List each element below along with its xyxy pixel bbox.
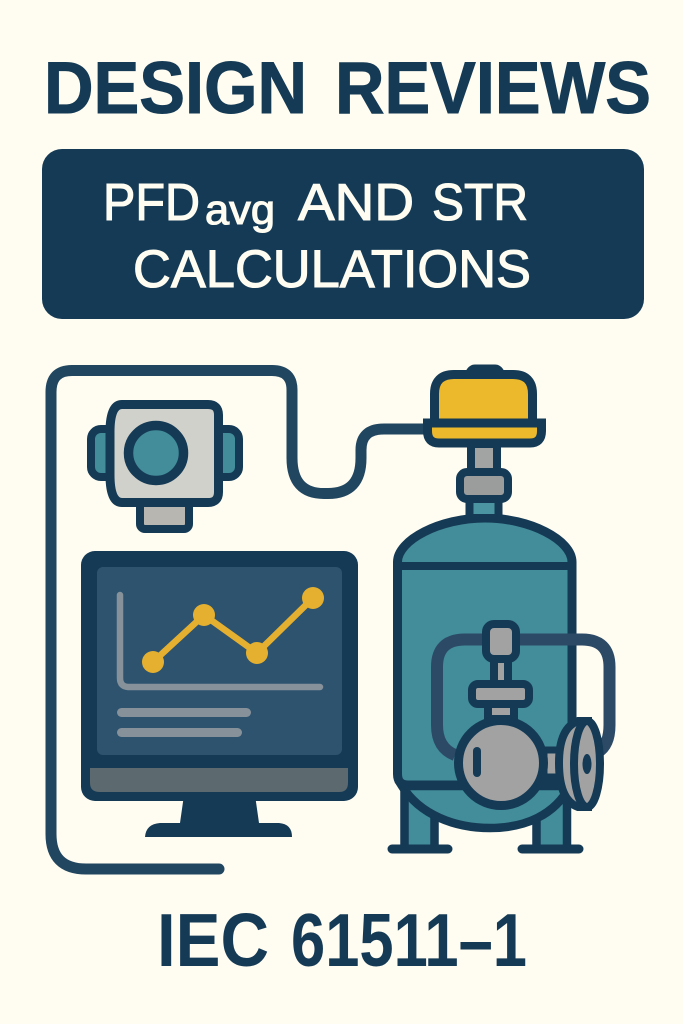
banner line 1: AND — [298, 174, 414, 232]
vessel band — [398, 562, 572, 570]
transmitter body — [110, 404, 218, 502]
bypass pipe — [437, 640, 610, 755]
transmitter bottom mount — [140, 495, 189, 529]
vessel legs — [404, 790, 567, 849]
stem upper — [471, 444, 497, 472]
title — [44, 48, 651, 129]
monitor — [81, 551, 358, 837]
text placeholder lines — [117, 708, 251, 737]
valve neck to flange — [544, 750, 560, 777]
title: REVIEWS — [335, 48, 651, 129]
flange — [559, 721, 600, 807]
stem coupling — [460, 472, 508, 499]
icon: transmitter — [91, 404, 239, 529]
actuator base — [428, 423, 542, 443]
banner line 1 — [103, 174, 528, 233]
monitor housing — [81, 551, 358, 801]
line chart — [120, 587, 324, 687]
chart line — [153, 598, 313, 662]
banner panel — [42, 149, 644, 319]
title: DESIGN — [44, 48, 307, 129]
footer standard label — [157, 898, 527, 982]
chart points — [142, 587, 324, 673]
transmitter side lugs — [91, 429, 131, 477]
banner line 1: avg — [205, 186, 275, 233]
valve yoke — [472, 624, 529, 719]
vessel with actuator and valve — [392, 366, 610, 849]
banner line 1: STR — [432, 174, 528, 232]
transmitter lens — [128, 426, 184, 480]
banner line 2: CALCULATIONS — [133, 240, 531, 299]
vessel bowl — [402, 786, 570, 828]
chart axes — [120, 595, 320, 687]
vessel feet — [392, 844, 579, 854]
footer standard label: 61511–1 — [291, 898, 527, 982]
actuator dome — [424, 366, 545, 443]
footer standard label: IEC — [157, 898, 269, 982]
valve ball — [458, 720, 544, 806]
monitor stand — [145, 795, 292, 837]
signal cable from transmitter loop to actuator — [51, 370, 430, 869]
monitor screen — [97, 567, 342, 755]
vessel body — [398, 518, 572, 785]
stem lower — [470, 499, 498, 518]
banner line 1: PFD — [103, 174, 200, 232]
monitor bottom bezel — [90, 768, 348, 792]
